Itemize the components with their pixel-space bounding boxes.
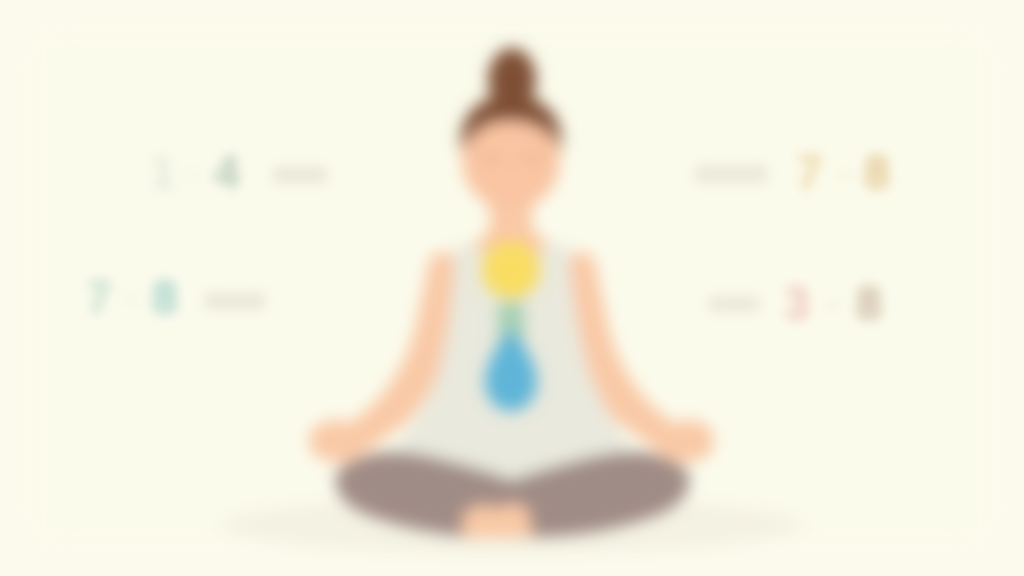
feet <box>462 504 532 538</box>
yellow chakra <box>482 241 540 299</box>
range: lower right <box>708 277 882 329</box>
range: lower right: – <box>824 285 843 323</box>
left hand <box>309 420 361 462</box>
range: top right <box>694 146 890 200</box>
blue chakra <box>485 328 537 411</box>
range: lower right: 3 <box>784 277 810 329</box>
range: top right: 7 <box>796 147 823 200</box>
range: top left: 1 <box>150 146 176 198</box>
label: lower left <box>204 292 266 310</box>
right arm <box>566 252 704 462</box>
head <box>462 110 560 210</box>
range: lower left: 8 <box>152 271 178 323</box>
range: lower left: – <box>122 279 141 317</box>
range: lower left: 7 <box>86 271 112 323</box>
tank top <box>388 245 635 485</box>
label: top right <box>694 164 768 184</box>
left arm <box>320 252 458 462</box>
legs <box>336 452 689 537</box>
range: top left: – <box>184 154 203 192</box>
closed eyes <box>482 156 540 160</box>
label: top left <box>272 166 328 184</box>
green chakra <box>498 302 524 350</box>
range: lower right: 8 <box>856 277 882 329</box>
hair bun <box>488 48 536 112</box>
range: lower left <box>86 271 266 323</box>
neck and chest <box>470 190 552 268</box>
range: top left: 4 <box>214 146 240 198</box>
range: top right: 8 <box>864 146 890 198</box>
meditating figure <box>309 48 714 538</box>
ground shadow <box>220 496 804 554</box>
hair cap <box>460 94 562 152</box>
chakra symbols <box>482 241 540 411</box>
range: top left <box>150 146 328 198</box>
range: top right: – <box>834 155 853 193</box>
right hand <box>666 420 714 462</box>
label: lower right <box>708 295 760 313</box>
